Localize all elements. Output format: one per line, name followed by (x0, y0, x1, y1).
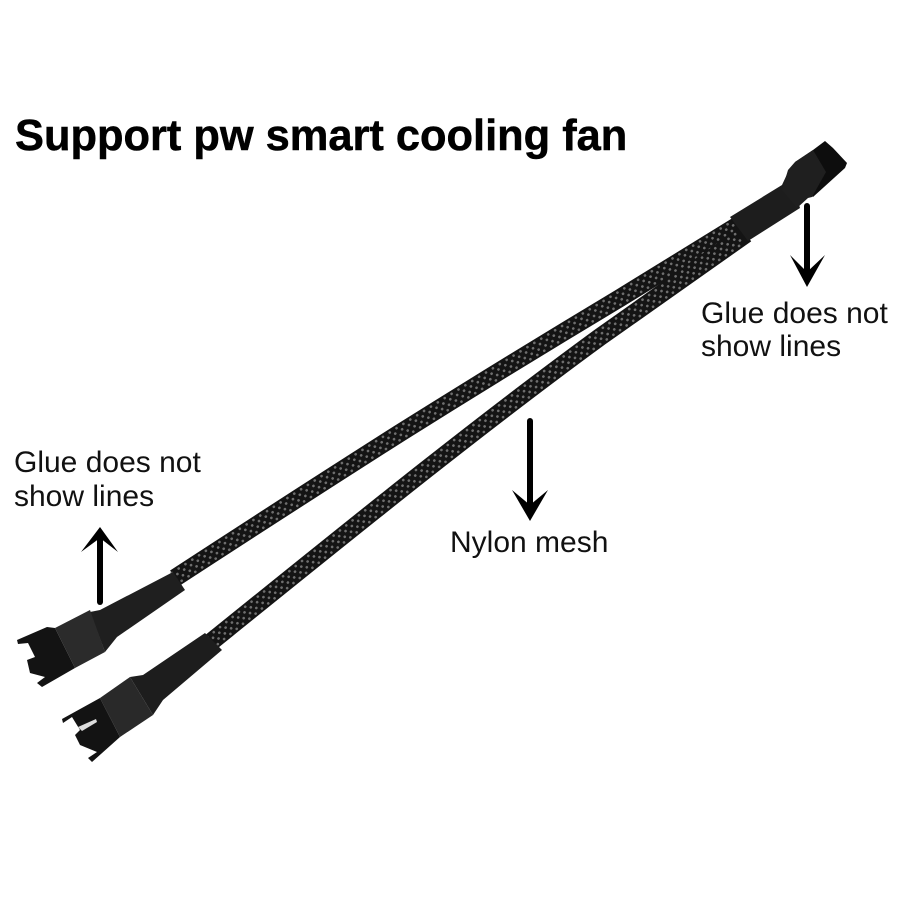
upper left connector (17, 572, 185, 687)
right connector (730, 141, 847, 241)
splitter cable illustration (17, 141, 847, 762)
lower braided cable (207, 233, 746, 647)
label: nylon mesh: Nylon mesh (450, 526, 608, 559)
arrow: nylon mesh (512, 418, 548, 521)
label: left connector: Glue does not (14, 446, 201, 479)
label: right connector: show lines (701, 330, 841, 363)
arrow: right connector (790, 203, 825, 287)
upper braided cable (172, 221, 740, 583)
arrow: left connector (81, 527, 118, 605)
label: right connector: Glue does not (701, 297, 888, 330)
title: Support pw smart cooling fan (15, 112, 627, 160)
lower left connector (62, 633, 222, 762)
label: left connector: show lines (14, 480, 154, 513)
